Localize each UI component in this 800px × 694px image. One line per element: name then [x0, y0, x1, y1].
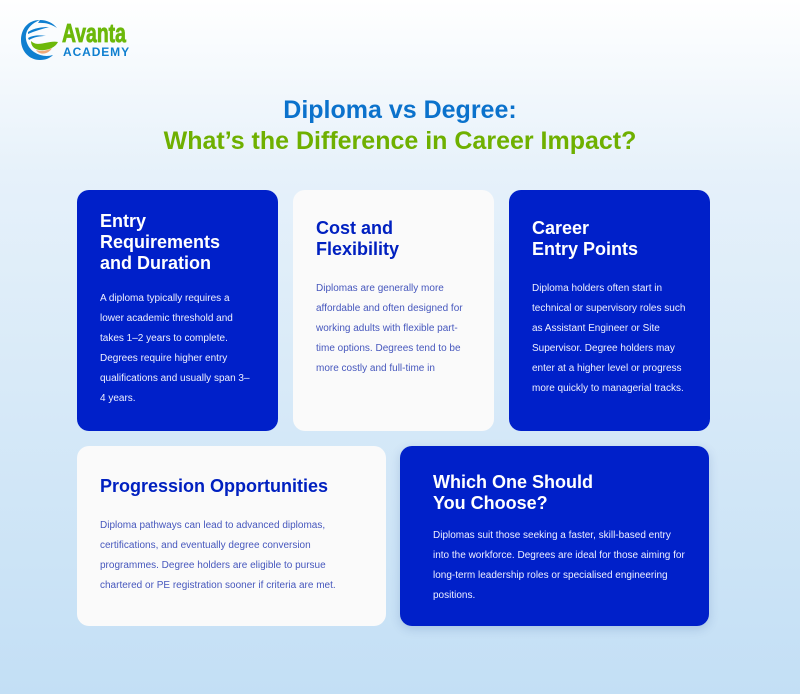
panel: cost and flexibility: [293, 190, 494, 431]
icon: globe and leaf: [21, 20, 58, 60]
panel: career entry points: [509, 190, 710, 431]
logo subtitle: ACADEMY: [63, 45, 130, 59]
title: [164, 96, 636, 155]
heading: [532, 218, 638, 259]
body text: affordable and often designed for: [316, 303, 463, 314]
panel: which one should you choose: [400, 446, 709, 626]
body text: [433, 530, 685, 601]
body text: positions.: [433, 590, 475, 601]
heading: [316, 218, 399, 259]
panel: entry requirements and duration: [77, 190, 278, 431]
body text: working adults with flexible part-: [316, 323, 458, 334]
panel: progression opportunities: [77, 446, 386, 626]
body text: [532, 283, 685, 394]
body text: enter at a higher level or progress: [532, 363, 682, 374]
heading: Progression Opportunities: [100, 476, 328, 496]
body text: A diploma typically requires a: [100, 293, 230, 304]
heading: Flexibility: [316, 239, 399, 259]
body text: takes 1–2 years to complete.: [100, 333, 228, 344]
body text: qualifications and usually span 3–: [100, 373, 250, 384]
body text: [100, 520, 336, 591]
body text: as Assistant Engineer or Site: [532, 323, 660, 334]
body text: Diploma holders often start in: [532, 283, 662, 294]
body text: more costly and full-time in: [316, 363, 435, 374]
title line 2: What’s the Difference in Career Impact?: [164, 127, 636, 155]
heading: Entry: [100, 211, 146, 231]
logo wordmark: Avanta: [62, 20, 126, 48]
body text: into the workforce. Degrees are ideal for those aiming for: [433, 550, 685, 561]
heading: Entry Points: [532, 239, 638, 259]
heading: Requirements: [100, 232, 220, 252]
body text: Degrees require higher entry: [100, 353, 227, 364]
heading: Cost and: [316, 218, 393, 238]
body text: more quickly to managerial tracks.: [532, 383, 684, 394]
body text: programmes. Degree holders are eligible to pursue: [100, 560, 326, 571]
heading: and Duration: [100, 253, 211, 273]
heading: Which One Should: [433, 472, 593, 492]
body text: time options. Degrees tend to be: [316, 343, 461, 354]
heading: [433, 472, 593, 513]
heading: Career: [532, 218, 589, 238]
logo: Avanta Academy: [21, 20, 130, 60]
body text: [100, 293, 250, 404]
title line 1: Diploma vs Degree:: [283, 96, 517, 124]
body text: [316, 283, 463, 374]
body text: certifications, and eventually degree conversion: [100, 540, 311, 551]
body text: Diplomas suit those seeking a faster, skill-based entry: [433, 530, 671, 541]
heading: You Choose?: [433, 493, 548, 513]
body text: chartered or PE registration sooner if criteria are met.: [100, 580, 336, 591]
heading: [100, 211, 220, 273]
body text: Supervisor. Degree holders may: [532, 343, 675, 354]
body text: Diploma pathways can lead to advanced diplomas,: [100, 520, 325, 531]
body text: technical or supervisory roles such: [532, 303, 685, 314]
body text: Diplomas are generally more: [316, 283, 444, 294]
body text: long-term leadership roles or specialised engineering: [433, 570, 668, 581]
body text: lower academic threshold and: [100, 313, 233, 324]
body text: 4 years.: [100, 393, 136, 404]
